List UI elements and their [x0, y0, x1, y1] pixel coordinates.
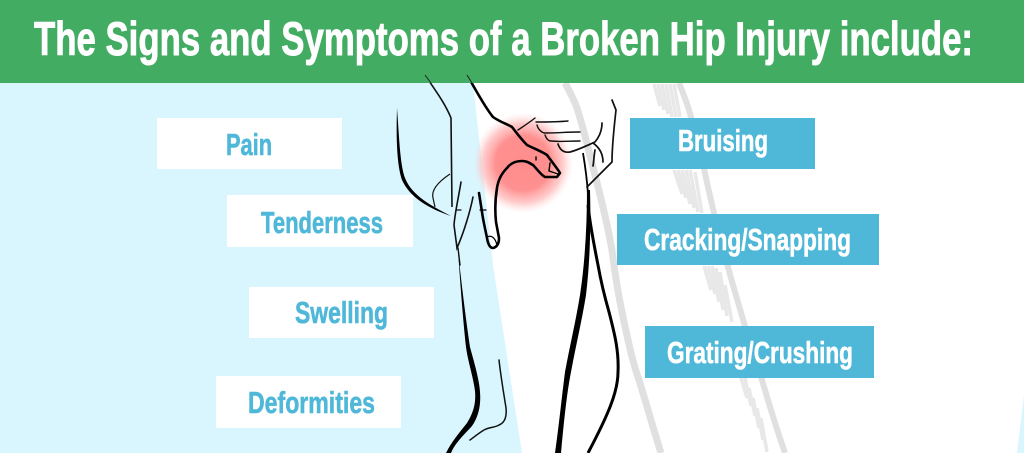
left foot — [470, 360, 506, 440]
label: Swelling: Swelling — [295, 295, 388, 330]
left hand fingers — [454, 182, 473, 265]
left leg line — [446, 250, 480, 453]
hand fingers — [518, 118, 580, 141]
figure tops crossing the banner — [425, 75, 472, 83]
label: Deformities — [216, 376, 401, 428]
title banner — [0, 0, 1024, 83]
pain highlight: red glow over the hip — [473, 113, 573, 213]
label: Tenderness: Tenderness — [261, 205, 383, 240]
label: Deformities: Deformities — [248, 385, 375, 420]
right leg lines — [555, 153, 618, 453]
label: Pain: Pain — [226, 127, 272, 162]
label: Tenderness — [227, 195, 413, 247]
label: Grating/Crushing — [645, 326, 874, 378]
label: Bruising — [630, 118, 815, 169]
right hand — [558, 100, 616, 187]
label: Grating/Crushing: Grating/Crushing — [667, 335, 853, 370]
label: Swelling — [249, 287, 434, 338]
label: Pain — [157, 118, 342, 169]
label: Cracking/Snapping: Cracking/Snapping — [644, 222, 851, 257]
skeleton: grey bone outlines — [565, 83, 785, 453]
left arm and hip outline — [397, 75, 452, 216]
label: Bruising: Bruising — [678, 123, 768, 158]
hand on hip with pointing thumb — [467, 75, 560, 248]
label: Cracking/Snapping — [617, 214, 879, 265]
figure: line drawing of legs and hand — [397, 75, 618, 453]
